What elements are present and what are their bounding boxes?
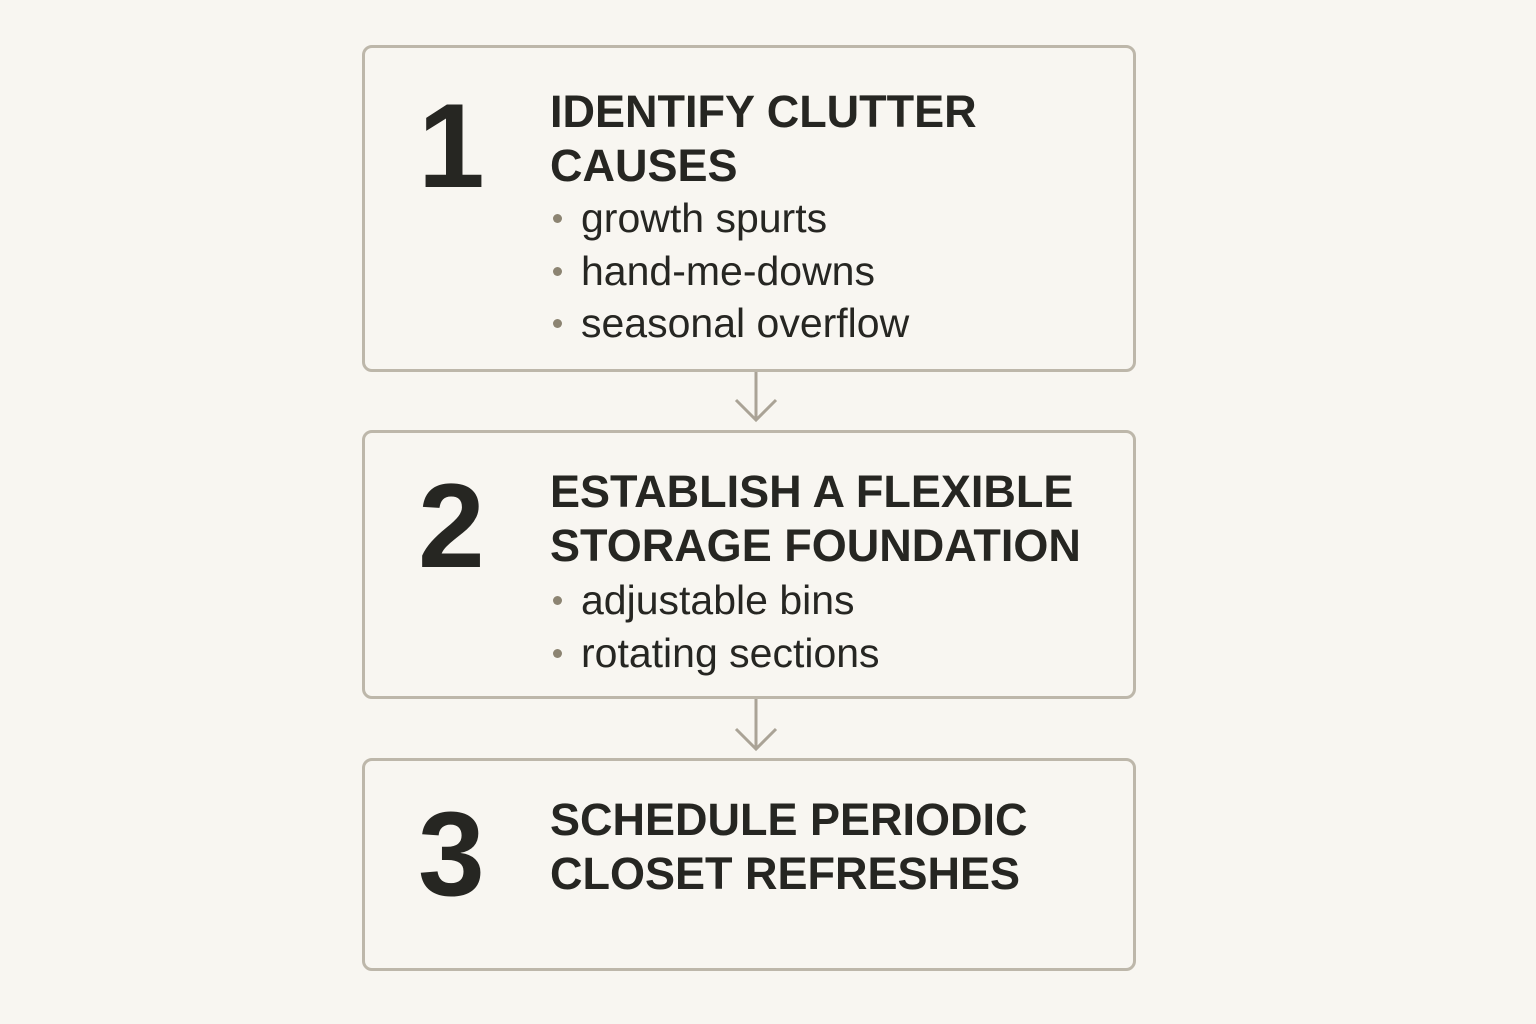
bullet list: storage: adjustable bins (581, 577, 855, 623)
bullet list: causes: seasonal overflow (581, 300, 909, 346)
heading: establish storage foundation (550, 466, 1081, 571)
panel: step 2 (362, 430, 1136, 699)
number 2: 2 (418, 459, 485, 593)
panel: step 1 (362, 45, 1136, 372)
number 3: 3 (418, 787, 485, 921)
heading: establish storage foundation: STORAGE FOUNDATION (550, 520, 1081, 571)
heading: schedule closet refreshes: CLOSET REFRESHES (550, 848, 1020, 899)
number 1: 1 (418, 79, 485, 213)
arrow 1 to 2 (735, 372, 777, 422)
bullet list: storage: rotating sections (581, 630, 880, 676)
bullet list: causes: growth spurts (581, 195, 827, 241)
bullet list: causes (553, 195, 910, 346)
heading: establish storage foundation: ESTABLISH A FLEXIBLE (550, 466, 1073, 517)
heading: identify clutter causes: IDENTIFY CLUTTER (550, 86, 977, 137)
bullet list: storage (553, 577, 880, 676)
heading: schedule closet refreshes (550, 794, 1028, 899)
heading: identify clutter causes (550, 86, 977, 191)
panel: step 3 (362, 758, 1136, 971)
heading: schedule closet refreshes: SCHEDULE PERIODIC (550, 794, 1028, 845)
bullet list: causes: hand-me-downs (581, 248, 875, 294)
arrow 2 to 3 (735, 699, 777, 751)
heading: identify clutter causes: CAUSES (550, 140, 738, 191)
